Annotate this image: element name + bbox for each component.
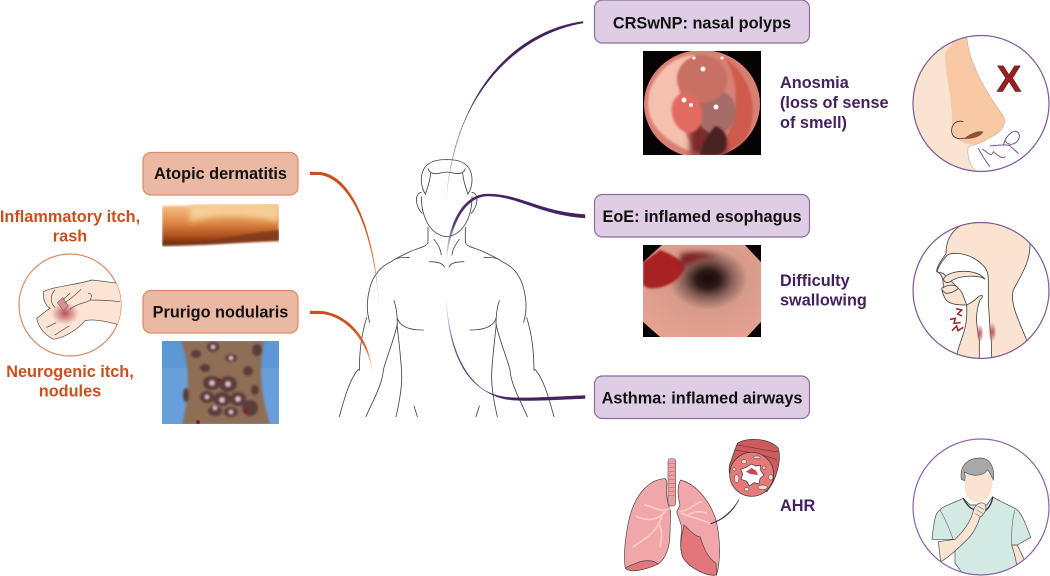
text: anosmia: Anosmia [780, 74, 850, 92]
right lung [677, 480, 720, 575]
text: neurogenic itch, nodules: Neurogenic itch, [6, 363, 134, 381]
left lung [624, 479, 671, 571]
photo: atopic dermatitis rash [162, 204, 279, 247]
icon: coughing man [913, 439, 1049, 576]
icon: nose with X [913, 33, 1050, 173]
illustration: lungs with airway cross section [624, 439, 779, 575]
text: inflammatory itch, rash: Inflammatory itch, [0, 208, 140, 226]
human body outline [339, 160, 554, 417]
text: anosmia: of smell) [780, 114, 847, 132]
airway section [729, 439, 779, 496]
label: EoE: EoE: inflamed esophagus [602, 208, 802, 226]
photo: inflamed esophagus endoscopy [643, 245, 761, 337]
icon: throat cross section [913, 220, 1049, 363]
text: difficulty swallowing: Difficulty [780, 272, 850, 290]
photo: prurigo nodularis nodules [162, 341, 279, 424]
connector: atopic dermatitis to body [310, 172, 380, 322]
text: inflammatory itch, rash: rash [53, 228, 87, 246]
text: AHR: AHR [780, 497, 816, 515]
icon mark: red X: X [997, 58, 1022, 100]
connector: EoE to body [446, 194, 585, 265]
label: Asthma: Asthma: inflamed airways [602, 390, 802, 408]
label: EoE [594, 194, 810, 237]
connector: asthma to body [446, 296, 585, 401]
label: Atopic dermatitis [143, 152, 298, 195]
text: difficulty swallowing: swallowing [780, 292, 867, 310]
label: CRSwNP [594, 0, 810, 43]
text: anosmia: (loss of sense [780, 94, 889, 112]
photo: nasal polyps endoscopy [643, 50, 761, 158]
connector: CRSwNP to body [446, 22, 583, 204]
icon: scratching hand [19, 254, 122, 356]
label: CRSwNP: CRSwNP: nasal polyps [613, 14, 791, 32]
trachea [668, 459, 676, 506]
pointer line [711, 499, 739, 524]
label: Prurigo nodularis: Prurigo nodularis [153, 304, 288, 322]
connector: prurigo nodularis to body [310, 311, 373, 376]
text: neurogenic itch, nodules: nodules [39, 382, 101, 400]
label: Atopic dermatitis: Atopic dermatitis [154, 165, 287, 183]
label: Prurigo nodularis [143, 290, 298, 333]
label: Asthma [594, 376, 810, 418]
